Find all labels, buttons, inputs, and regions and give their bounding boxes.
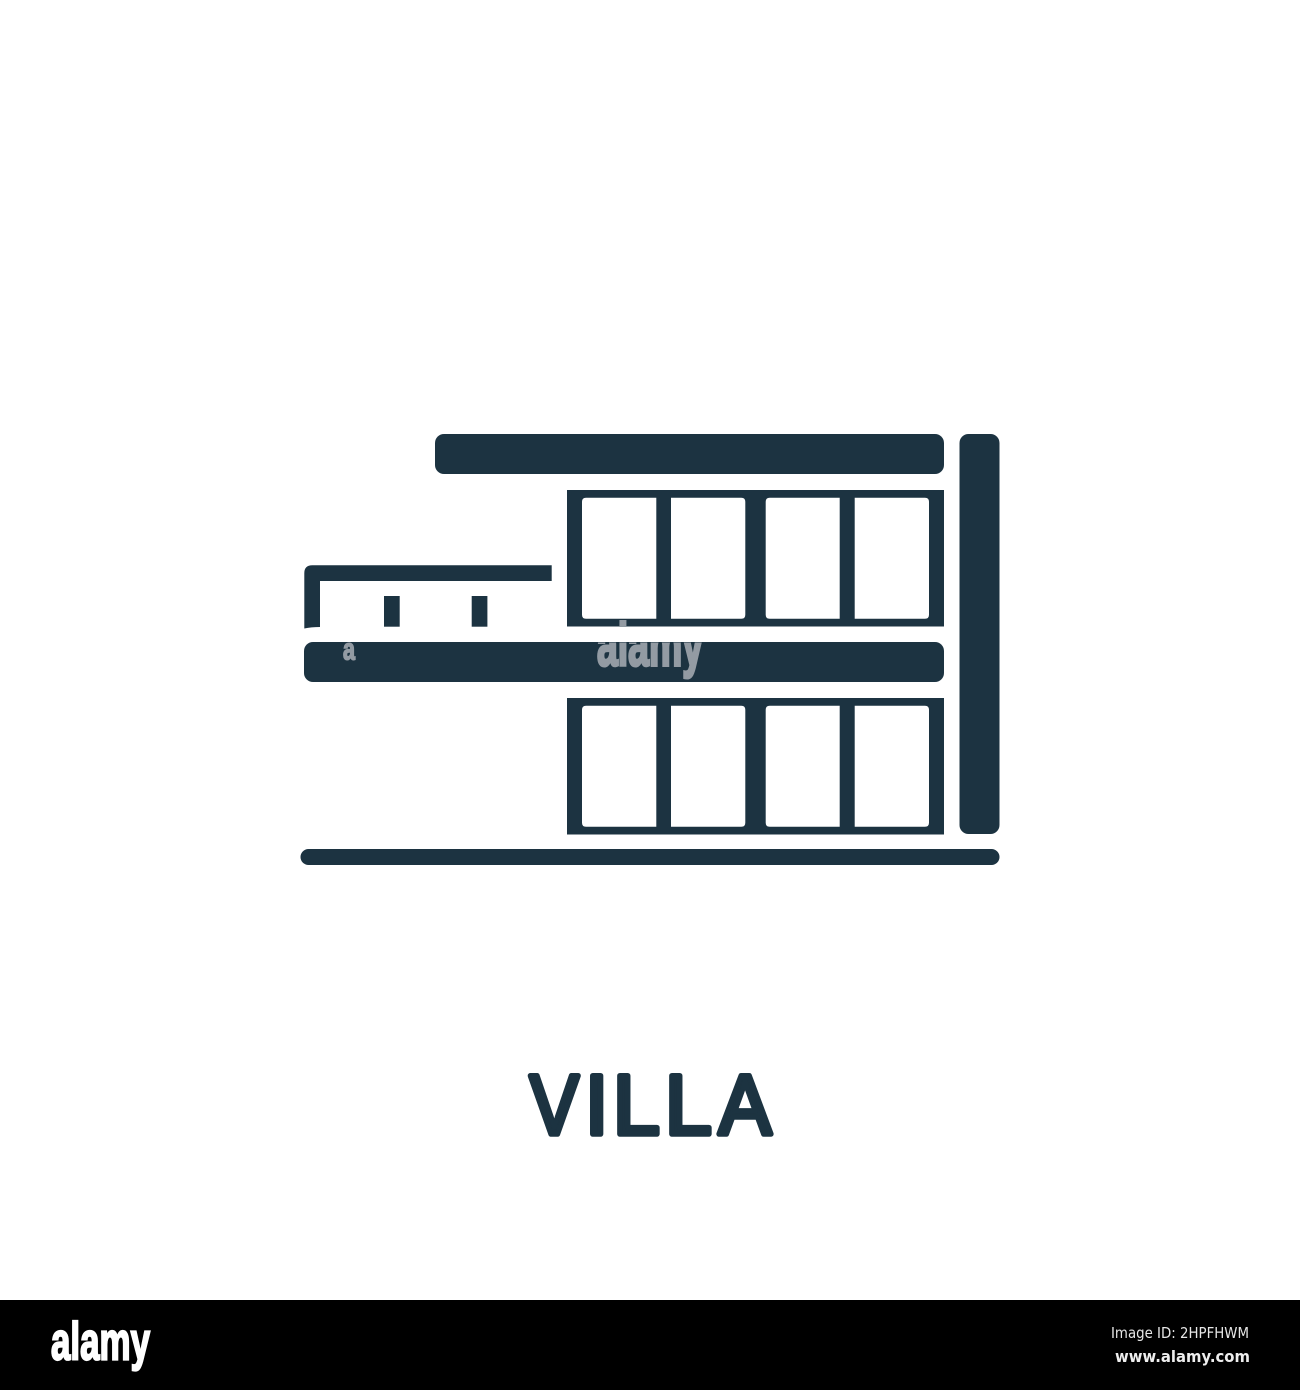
icon part: lower floor windows — [567, 698, 944, 834]
footer logo: alamy: alamy — [51, 1312, 150, 1372]
icon part: right side column — [960, 434, 1000, 834]
footer url: www.alamy.com — [1115, 1347, 1250, 1366]
title: VILLA: A — [719, 1058, 771, 1152]
icon: villa building — [300, 434, 1000, 865]
footer image id: Image ID: 2HPFHWM — [1111, 1324, 1249, 1342]
icon part: top roof slab — [435, 434, 944, 474]
title: VILLA: I — [585, 1058, 608, 1152]
watermark on icon: a — [343, 632, 356, 666]
footer bar — [0, 1300, 1300, 1390]
watermark on icon — [343, 620, 702, 680]
title: VILLA: L — [665, 1058, 712, 1152]
icon part: ground line — [300, 849, 1000, 865]
title: VILLA: L — [613, 1058, 660, 1152]
title: VILLA: V — [530, 1058, 579, 1152]
icon part: balcony railing — [304, 565, 552, 628]
icon part: middle floor slab — [304, 642, 944, 682]
icon part: upper floor windows — [567, 490, 944, 626]
watermark on icon: alamy — [597, 612, 703, 678]
